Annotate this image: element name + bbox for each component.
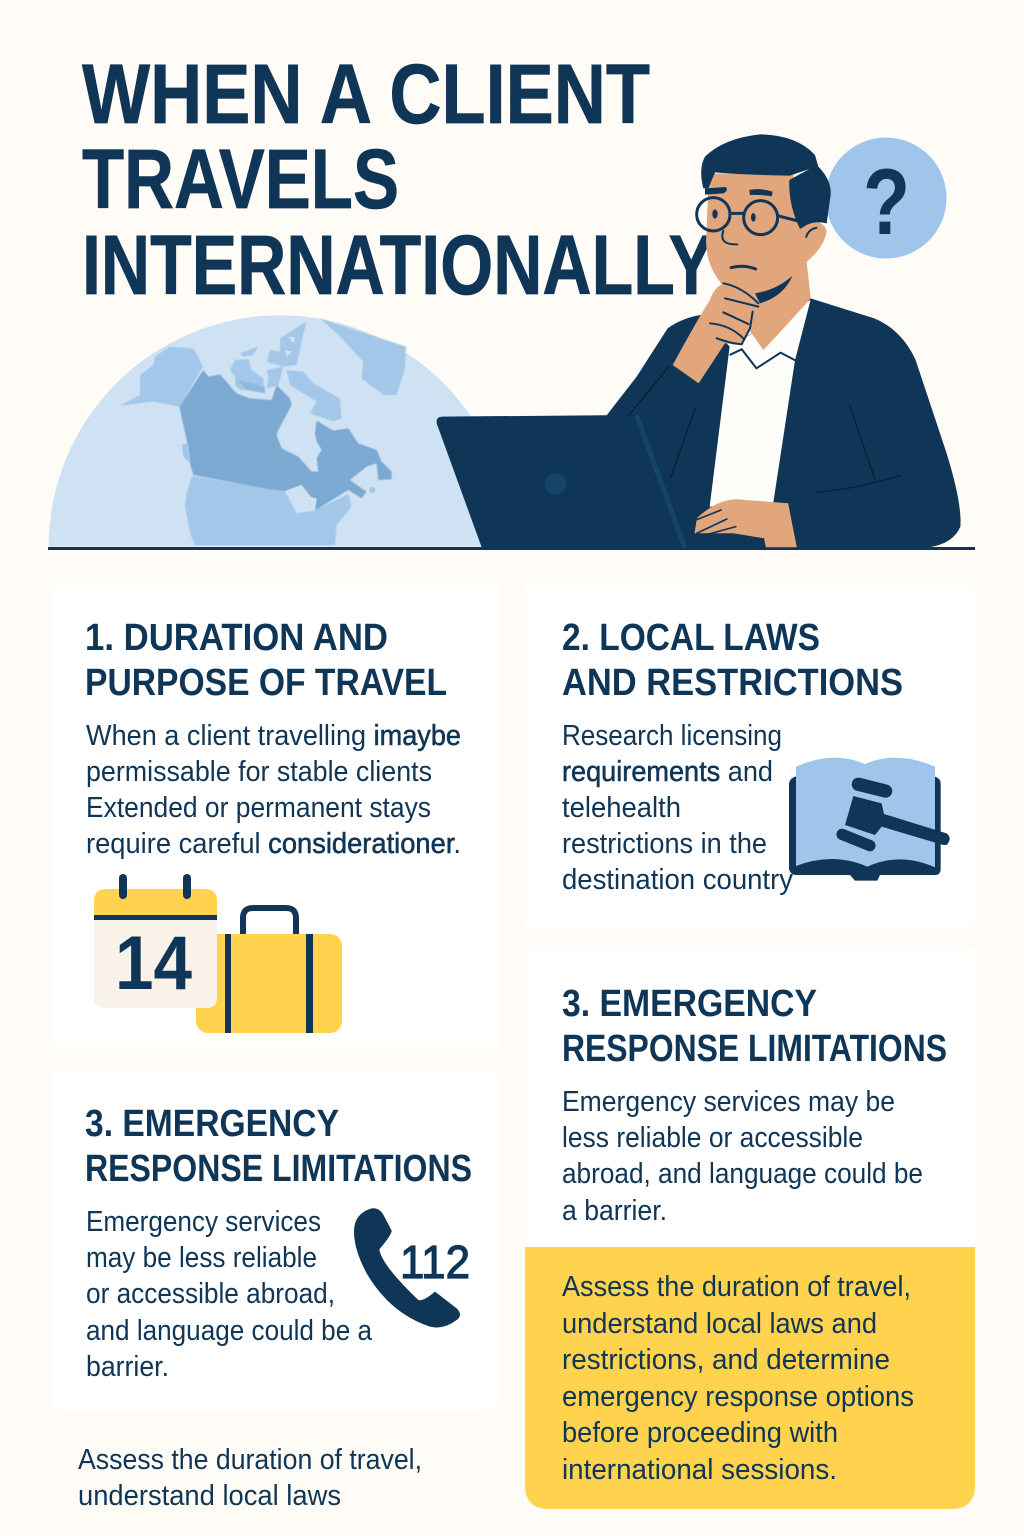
footer text: understand local laws	[78, 1480, 341, 1512]
body text	[86, 1206, 373, 1383]
heading: PURPOSE OF TRAVEL	[85, 662, 447, 704]
body text: Emergency services	[86, 1206, 321, 1238]
illustration: globe with North America map	[49, 315, 511, 547]
map details	[273, 337, 323, 513]
body text: Extended or permanent stays	[86, 792, 431, 824]
raised hand	[673, 283, 758, 383]
heading: 3. EMERGENCY	[85, 1103, 339, 1145]
icon: phone handset with 112	[354, 1208, 470, 1327]
footer text	[78, 1444, 422, 1512]
heading: RESPONSE LIMITATIONS	[562, 1028, 947, 1070]
body text: may be less reliable	[86, 1242, 317, 1274]
icon: suitcase	[196, 908, 342, 1033]
hair	[701, 134, 831, 229]
callout: yellow summary: emergency response options	[562, 1381, 914, 1413]
body text: destination country	[562, 864, 793, 896]
nose and mouth	[722, 231, 737, 244]
panel: duration and purpose	[50, 585, 499, 1047]
heading	[85, 1103, 472, 1190]
body text: When a client travelling imaybe	[86, 720, 461, 752]
title: INTERNATIONALLY	[82, 218, 714, 312]
body text	[562, 720, 793, 896]
USA	[185, 476, 352, 545]
panel: emergency response right	[526, 950, 975, 1250]
body text: permissable for stable clients	[86, 756, 432, 788]
panel: local laws	[526, 585, 975, 927]
title: TRAVELS	[82, 132, 399, 226]
icon: phone handset with 112: 112	[400, 1236, 470, 1288]
heading: 2. LOCAL LAWS	[562, 617, 820, 659]
heading	[562, 617, 903, 704]
icon: law book and gavel	[789, 758, 950, 881]
callout: yellow summary: Assess the duration of travel,	[562, 1271, 911, 1303]
body text: Research licensing	[562, 720, 782, 752]
icon: calendar	[94, 874, 217, 1008]
body text: telehealth	[562, 792, 681, 824]
heading	[562, 983, 947, 1070]
Canada	[179, 370, 392, 511]
chin shadow	[755, 276, 793, 303]
title	[82, 47, 714, 312]
heading: 3. EMERGENCY	[562, 983, 817, 1025]
body text	[562, 1086, 923, 1227]
body text: require careful considerationer.	[86, 828, 461, 860]
body text: restrictions in the	[562, 828, 767, 860]
body text	[86, 720, 461, 860]
panel: emergency response left	[50, 1070, 499, 1411]
callout: yellow summary: before proceeding with	[562, 1417, 838, 1449]
icon: calendar: 14	[115, 921, 192, 1006]
body text: requirements and	[562, 756, 773, 788]
heading: 1. DURATION AND	[85, 617, 388, 659]
heading: AND RESTRICTIONS	[562, 662, 903, 704]
illustration: thoughtful man at laptop	[437, 134, 961, 547]
Arctic islands	[230, 359, 264, 390]
body text: and language could be a	[86, 1315, 373, 1347]
body text: barrier.	[86, 1351, 169, 1383]
laptop and lower hand	[437, 366, 902, 547]
callout: yellow summary: international sessions.	[562, 1454, 837, 1486]
icon: question bubble	[826, 138, 946, 258]
head and raised hand	[673, 134, 831, 383]
torso and shirt	[606, 298, 961, 547]
heading	[85, 617, 447, 704]
face	[706, 173, 827, 350]
ear line	[806, 228, 817, 238]
heading: RESPONSE LIMITATIONS	[85, 1148, 472, 1190]
callout: yellow summary: restrictions, and determine	[562, 1344, 890, 1376]
body text: or accessible abroad,	[86, 1278, 335, 1310]
icon: question bubble: ?	[863, 149, 910, 254]
callout: yellow summary	[525, 1247, 975, 1509]
title: WHEN A CLIENT	[82, 47, 650, 141]
body text: a barrier.	[562, 1195, 667, 1227]
baseline rule	[48, 547, 975, 550]
Greenland	[320, 318, 406, 395]
body text: less reliable or accessible	[562, 1122, 863, 1154]
Alaska	[120, 347, 203, 407]
body text: Emergency services may be	[562, 1086, 895, 1118]
glasses	[697, 198, 798, 235]
callout: yellow summary: understand local laws and	[562, 1308, 877, 1340]
footer text: Assess the duration of travel,	[78, 1444, 422, 1476]
body text: abroad, and language could be	[562, 1158, 923, 1190]
eyebrows	[705, 187, 773, 196]
